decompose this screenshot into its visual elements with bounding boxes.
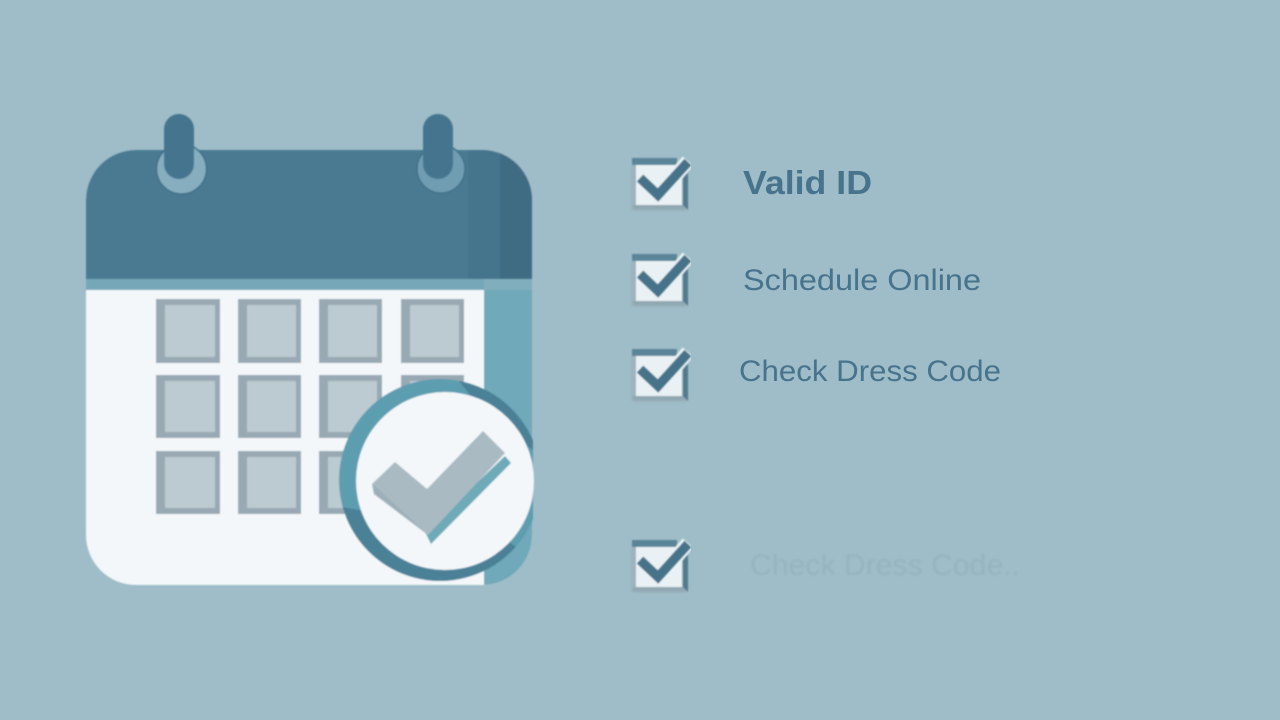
header band (86, 279, 532, 290)
calendar header (86, 150, 532, 279)
checkbox (632, 158, 688, 210)
checklist item: faded Check Dress Code (632, 540, 1020, 592)
checklist item: Check Dress Code (632, 349, 1001, 401)
label: Schedule Online (743, 264, 981, 297)
date grid (156, 299, 464, 514)
label: Check Dress Code (739, 355, 1001, 388)
binder ring left (156, 114, 206, 194)
badge checkmark (372, 431, 511, 544)
binder ring right (417, 114, 465, 193)
right side strip (484, 290, 532, 585)
label: Valid ID (743, 164, 872, 201)
faded label: Check Dress Code.. (750, 549, 1020, 582)
calendar body (86, 150, 532, 585)
check badge (338, 378, 535, 582)
checkbox (632, 349, 688, 401)
checkbox (632, 540, 688, 592)
checkbox (632, 254, 688, 306)
checklist item: Schedule Online (632, 254, 981, 306)
icon: calendar with check badge (86, 114, 534, 590)
checklist item: Valid ID (632, 158, 872, 210)
